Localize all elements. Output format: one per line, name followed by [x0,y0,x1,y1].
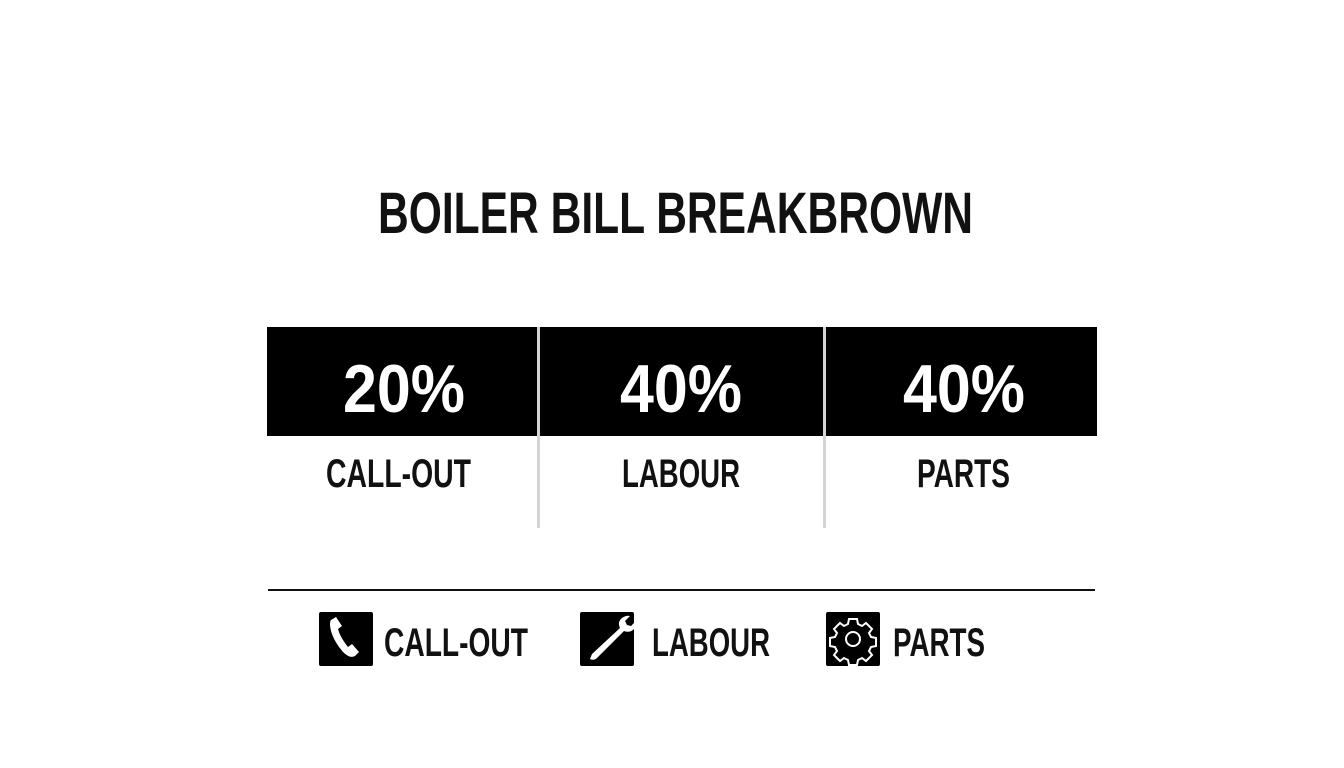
column: call-out: 20% [343,351,465,427]
icon: gear [826,612,880,666]
column: call-out [326,351,471,496]
title: BOILER BILL BREAKBROWN [378,181,973,246]
column: call-out: CALL-OUT [326,452,471,496]
column: labour: 40% [620,351,742,427]
legend label: labour: LABOUR [652,621,770,665]
black header band [267,327,1097,436]
column: labour [620,351,742,496]
legend label: parts: PARTS [893,621,985,665]
legend label: call-out: CALL-OUT [384,621,528,665]
icon: phone [319,612,373,666]
legend [319,612,985,666]
column: parts [903,351,1025,496]
column: parts: 40% [903,351,1025,427]
column: parts: PARTS [917,452,1010,496]
column: labour: LABOUR [622,452,740,496]
icon: wrench [580,612,636,666]
panel: percentage table [267,327,1097,528]
